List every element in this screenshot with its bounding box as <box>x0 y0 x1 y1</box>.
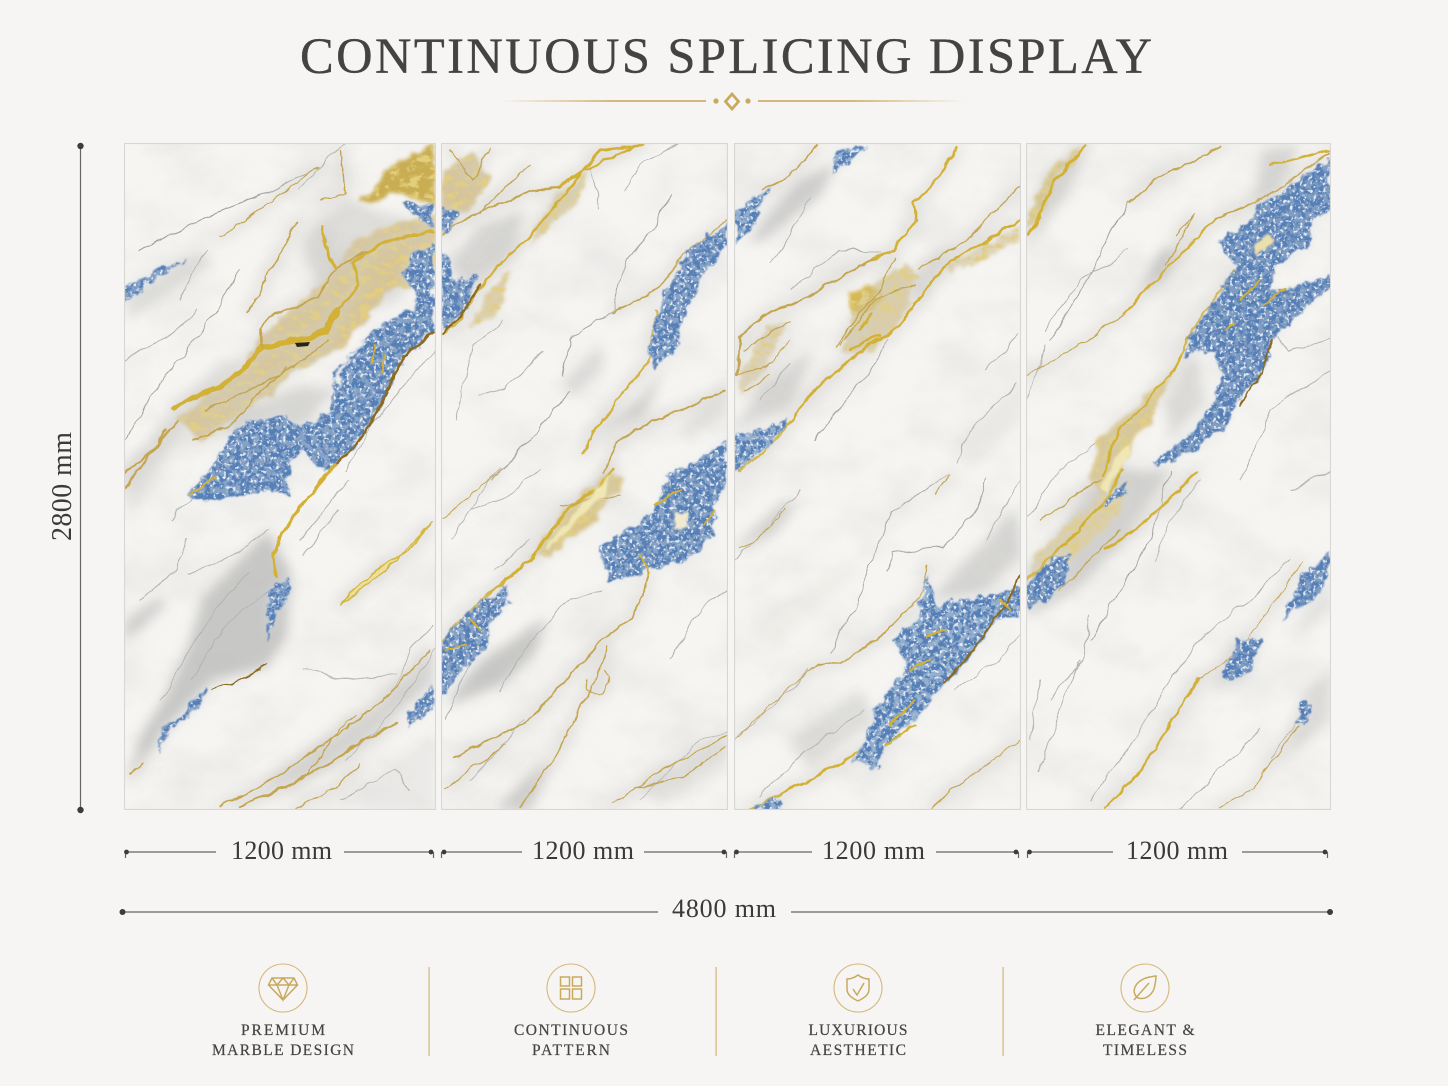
dimension: slab 4 width: 1200 mm <box>1126 836 1228 865</box>
dimension: slab 1 width <box>124 836 433 865</box>
feature label: premium marble design: PREMIUM <box>241 1022 325 1039</box>
icon: shield with check <box>834 964 882 1012</box>
feature label: luxurious aesthetic: LUXURIOUS <box>808 1022 908 1039</box>
panel: marble slab 4 <box>1026 143 1331 810</box>
feature label: continuous pattern: CONTINUOUS <box>514 1022 628 1039</box>
feature label: elegant and timeless: TIMELESS <box>1103 1042 1187 1059</box>
icon: leaf <box>1121 964 1169 1012</box>
dimension: slab 3 width: 1200 mm <box>822 836 925 865</box>
panel: marble slab 3 <box>734 143 1021 810</box>
feature label: elegant and timeless <box>1096 1022 1194 1059</box>
panel: marble slab 1 <box>124 143 436 810</box>
dimension: total width 4800 mm <box>120 894 1333 923</box>
title: CONTINUOUS SPLICING DISPLAY <box>300 28 1152 84</box>
feature label: elegant and timeless: ELEGANT & <box>1096 1022 1194 1039</box>
feature label: luxurious aesthetic <box>808 1022 908 1059</box>
icon: grid pattern <box>547 964 595 1012</box>
feature label: continuous pattern <box>514 1022 628 1059</box>
feature label: premium marble design <box>212 1022 354 1059</box>
icon: diamond <box>259 964 307 1012</box>
title ornament <box>500 94 965 109</box>
dimension: height 2800 mm: 2800 mm <box>47 432 78 541</box>
dimension: slab 1 width: 1200 mm <box>231 836 332 865</box>
feature label: premium marble design: MARBLE DESIGN <box>212 1042 354 1059</box>
dimension: slab 2 width: 1200 mm <box>532 836 634 865</box>
dimension: total width 4800 mm: 4800 mm <box>672 894 776 923</box>
dimension: slab 4 width <box>1027 836 1328 865</box>
dimension: slab 2 width <box>442 836 726 865</box>
dimension: slab 3 width <box>734 836 1018 865</box>
panel: marble slab 2 <box>441 143 728 810</box>
dimension: height 2800 mm <box>47 143 84 813</box>
feature label: continuous pattern: PATTERN <box>532 1042 610 1059</box>
feature label: luxurious aesthetic: AESTHETIC <box>810 1042 906 1059</box>
